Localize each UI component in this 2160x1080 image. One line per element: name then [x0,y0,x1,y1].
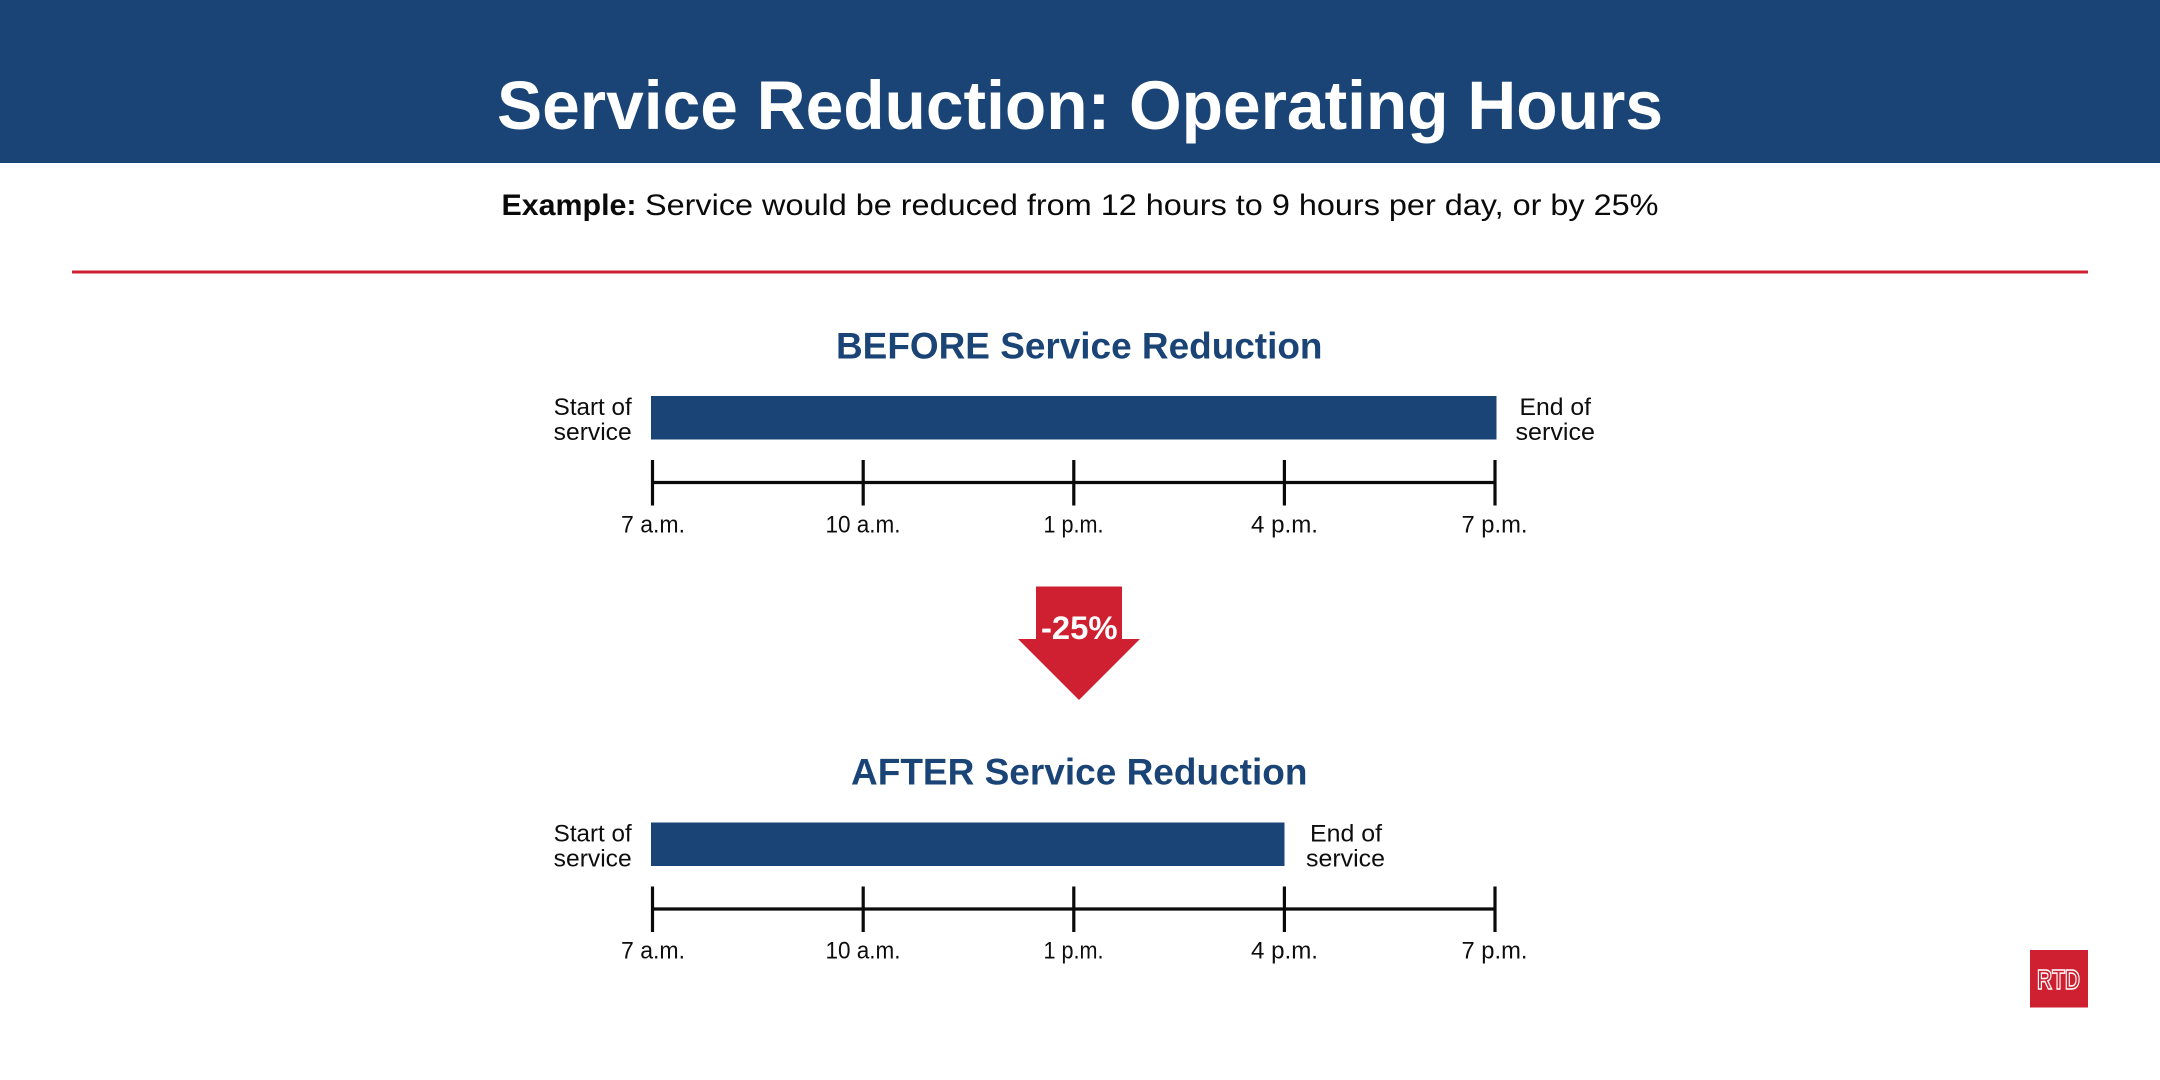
label: start of service [554,820,632,872]
panel: after service reduction [554,752,1528,964]
logo: RTD: RTD [2037,964,2080,995]
label: start of service: Start of [554,394,632,421]
timeline axis: 1 p.m. [1044,512,1104,538]
label: end of service [1306,820,1385,872]
arrow: 25 percent reduction: -25% [1041,610,1118,646]
timeline axis: 7 a.m. [621,938,685,964]
heading: before: BEFORE Service Reduction [836,326,1322,366]
label: start of service: Start of [554,820,632,848]
panel: before service reduction [554,326,1595,538]
timeline axis: 4 p.m. [1251,512,1318,538]
heading: after: AFTER Service Reduction [851,752,1308,792]
label: start of service: service [554,419,632,446]
timeline axis: 10 a.m. [826,512,900,538]
label: end of service: End of [1310,820,1382,848]
logo: RTD [2030,950,2088,1008]
timeline axis: 7 p.m. [1462,938,1528,964]
label: end of service: End of [1520,394,1591,421]
timeline axis [621,460,1528,538]
timeline axis: 1 p.m. [1044,938,1104,964]
label: start of service: service [554,846,632,872]
timeline axis: 7 p.m. [1462,512,1528,538]
example text block: Service would be reduced from 12 hours to 9 hours per day, or by 25% [645,189,1658,222]
example text block: Example: [502,189,636,222]
label: end of service: service [1516,419,1595,446]
service bar: 7 a.m. to 7 p.m. [651,396,1496,440]
timeline axis: 7 a.m. [621,512,685,538]
title: Service Reduction: Operating Hours [497,67,1663,144]
label: end of service [1516,394,1595,446]
timeline axis [621,886,1528,964]
arrow: 25 percent reduction [1018,586,1140,700]
service bar: 7 a.m. to 4 p.m. [651,822,1284,866]
header band [0,0,2160,163]
label: start of service [554,394,632,446]
timeline axis: 4 p.m. [1251,938,1318,964]
label: end of service: service [1306,846,1385,872]
timeline axis: 10 a.m. [826,938,900,964]
